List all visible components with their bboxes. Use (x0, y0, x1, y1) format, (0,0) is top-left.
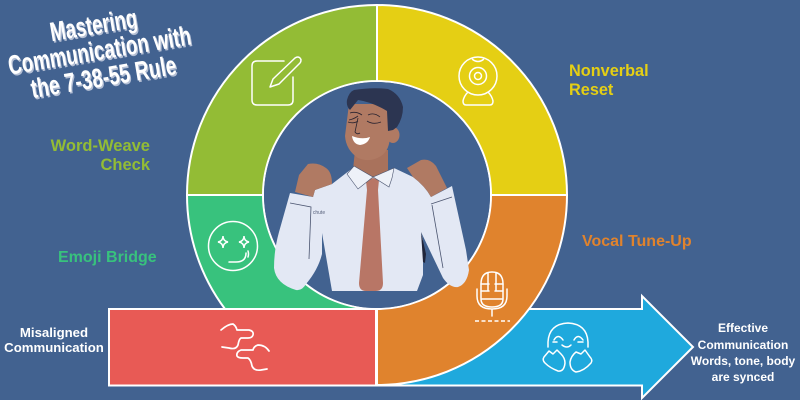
icon: microphone (475, 272, 510, 321)
label: misaligned communication: Misaligned (20, 325, 88, 340)
shirt and sleeves (274, 167, 469, 291)
dark gap shadow (421, 232, 426, 263)
hair (347, 88, 403, 131)
tiny shirt label: chute (313, 210, 325, 216)
neck (353, 150, 388, 182)
ring segment: vocal tune-up (377, 195, 567, 385)
smile (352, 136, 370, 145)
label: word-weave check: Check (100, 156, 151, 174)
arrow: effective communication (376, 296, 693, 398)
label: nonverbal reset: Reset (569, 81, 614, 99)
title: the 7-38-55 Rule (30, 52, 180, 106)
label: misaligned communication (4, 325, 104, 355)
label: nonverbal reset (569, 62, 649, 99)
center circle (264, 82, 490, 308)
label: word-weave check: Word-Weave (51, 137, 150, 155)
label: nonverbal reset: Nonverbal (569, 62, 649, 80)
title: Communication with (7, 22, 194, 82)
ring segment: word-weave check (187, 5, 377, 195)
ring segment: nonverbal reset (377, 5, 567, 195)
left fist (295, 164, 332, 197)
person illustration (274, 88, 469, 291)
label: effective communication: Communication (698, 338, 788, 352)
collar (347, 166, 394, 189)
title: the 7-38-55 Rule (29, 50, 178, 104)
right fist (407, 160, 447, 197)
closed eyes and nose (348, 112, 381, 134)
label: effective communication (691, 321, 796, 384)
label: misaligned communication: Communication (4, 340, 104, 355)
title: Communication with (6, 21, 193, 81)
label: word-weave check (51, 137, 151, 174)
icon: notepad and pencil (252, 57, 301, 105)
label: effective communication: Effective (718, 321, 768, 335)
icon: misaligned hands (221, 324, 269, 370)
icon: webcam (459, 57, 497, 105)
label: effective communication: Words, tone, body (691, 354, 796, 368)
icon: happy face with hands (543, 323, 592, 372)
label: vocal tune-up: Vocal Tune-Up (582, 233, 692, 250)
label: effective communication: are synced (712, 370, 774, 384)
icon: emoji face (208, 222, 258, 270)
sleeve seams (290, 197, 452, 268)
tie (359, 178, 383, 291)
ear (386, 127, 400, 143)
ring segment: emoji bridge (187, 195, 377, 309)
head (345, 104, 390, 160)
label: emoji bridge: Emoji Bridge (58, 249, 157, 266)
red bar: misaligned communication (109, 309, 376, 386)
title (1, 0, 199, 109)
